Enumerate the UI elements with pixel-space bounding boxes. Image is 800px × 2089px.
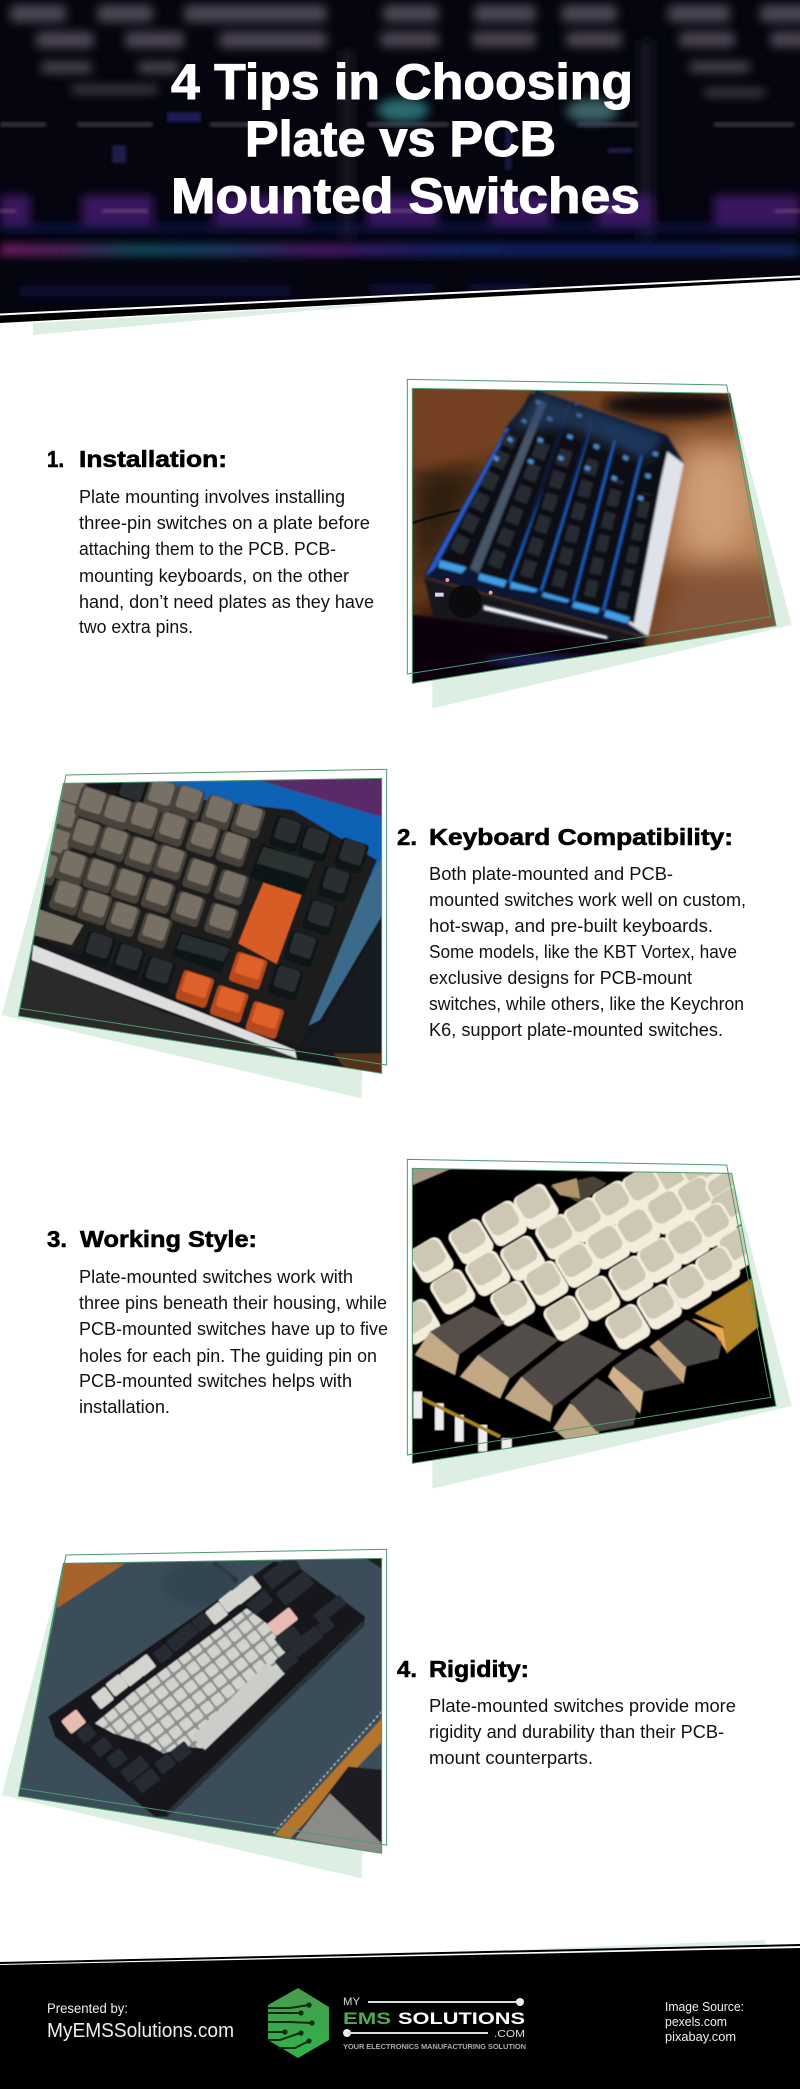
gold key (695, 1278, 758, 1353)
frame outline 2 (18, 769, 387, 1073)
body 4: Plate-mounted switches provide more (429, 1696, 736, 1716)
function keys (91, 1575, 262, 1710)
panel: photo 2 orange keycaps keyboard (0, 760, 400, 1098)
light strip (0, 245, 800, 255)
header white line (0, 276, 800, 314)
body 4: rigidity and durability than their PCB- (429, 1722, 724, 1742)
body 3: three pins beneath their housing, while (79, 1293, 387, 1313)
teal glows (377, 98, 618, 123)
keyboard case (48, 1562, 365, 1817)
green shadow 1 (432, 393, 792, 708)
body 1: three-pin switches on a plate before (79, 513, 370, 533)
body 3: holes for each pin. The guiding pin on (79, 1346, 377, 1366)
body 2: Both plate-mounted and PCB- (429, 864, 673, 884)
title: Plate vs PCB (245, 111, 556, 167)
blue legends (495, 400, 657, 500)
header keyboard photo (0, 0, 800, 320)
title: 4 Tips in Choosing (171, 54, 633, 110)
footer black edge (0, 1944, 800, 1964)
panel: 4 rigidity text (397, 1656, 736, 1768)
image source: pixabay.com (665, 2030, 736, 2044)
frame outline 4 (18, 1549, 387, 1853)
panel: 3 working style text (47, 1226, 388, 1417)
logo (268, 1988, 526, 2058)
body 2: switches, while others, like the Keychron (429, 994, 744, 1014)
body 2 (429, 864, 746, 1040)
photo 1 (412, 389, 776, 683)
footer band (0, 1940, 800, 2089)
body 3: installation. (79, 1397, 170, 1417)
dark modifier keys (415, 1332, 460, 1375)
body 1: mounting keyboards, on the other (79, 566, 349, 586)
cream keys back to front (655, 1172, 688, 1192)
body 1 (79, 487, 374, 637)
body 2: exclusive designs for PCB-mount (429, 968, 692, 988)
panel: 2 keyboard compatibility text (397, 824, 746, 1040)
body 2: Some models, like the KBT Vortex, have (429, 942, 737, 962)
heading 3: 3. (47, 1226, 67, 1252)
panel: photo 3 cream keycaps keyboard (406, 1158, 792, 1488)
logo wordmark: SOLUTIONS (398, 2009, 525, 2028)
heading 4: 4. (397, 1656, 417, 1682)
footer black panel (0, 1948, 800, 2089)
top blur haze (510, 392, 663, 460)
presented by (47, 2001, 234, 2042)
body 2: mounted switches work well on custom, (429, 890, 746, 910)
heading 1: Installation: (79, 446, 227, 472)
logo wordmark: EMS (343, 2009, 391, 2028)
panel: photo 1 blue-lit keyboard (406, 378, 792, 708)
body 4 (429, 1696, 736, 1768)
body 1: attaching them to the PCB. PCB- (79, 539, 336, 559)
key columns (440, 393, 669, 623)
faint key legends (112, 112, 632, 170)
accent: header green wedge (33, 302, 408, 335)
frame outline 3 (407, 1159, 776, 1463)
heading 4: Rigidity: (429, 1656, 529, 1682)
footer green wedge (380, 1940, 765, 1955)
body 1: Plate mounting involves installing (79, 487, 345, 507)
photo 3 (412, 1169, 776, 1463)
panel: 1 installation text (47, 446, 374, 637)
image source: Image Source: (665, 2000, 744, 2014)
key tops (457, 435, 647, 608)
body 1: hand, don’t need plates as they have (79, 592, 374, 612)
green shadow 2 (2, 783, 363, 1098)
green shadow 3 (432, 1173, 792, 1488)
body 3: Plate-mounted switches work with (79, 1267, 353, 1287)
photo 2 (19, 779, 382, 1073)
orange keys (238, 883, 302, 964)
logo wordmark: YOUR ELECTRONICS MANUFACTURING SOLUTION (343, 2042, 526, 2051)
logo wordmark (343, 1996, 526, 2051)
purple row (0, 195, 800, 231)
body 1: two extra pins. (79, 617, 193, 637)
body 4: mount counterparts. (429, 1748, 593, 1768)
image source: pexels.com (665, 2015, 727, 2029)
icon: circuit hexagon (268, 1988, 329, 2058)
front bar (424, 578, 647, 650)
heading 3: Working Style: (80, 1226, 257, 1252)
heading 1: 1. (47, 446, 64, 472)
photo 4 (19, 1559, 382, 1853)
black keys (270, 816, 304, 852)
lit bottoms (438, 560, 630, 623)
body 3 (79, 1267, 388, 1417)
header black edge (0, 274, 800, 323)
title: Mounted Switches (171, 168, 640, 224)
body 2: K6, support plate-mounted switches. (429, 1020, 723, 1040)
presented by: MyEMSSolutions.com (47, 2020, 234, 2042)
heading 2: 2. (397, 824, 417, 850)
white alpha block (95, 1608, 285, 1753)
body 3: PCB-mounted switches have up to five (79, 1319, 388, 1339)
panel: photo 4 dark tenkeyless keyboard (0, 1540, 400, 1878)
presented by: Presented by: (47, 2001, 128, 2016)
logo wordmark: MY (343, 1996, 361, 2008)
header band (0, 0, 800, 335)
keyboard body (423, 390, 684, 637)
body 3: PCB-mounted switches helps with (79, 1371, 352, 1391)
title (171, 54, 640, 224)
key field (81, 790, 377, 1027)
frame outline 1 (407, 379, 776, 683)
switch pins (413, 1392, 512, 1458)
body 2: hot-swap, and pre-built keyboards. (429, 916, 713, 936)
image source (665, 2000, 744, 2044)
pink keys (61, 1709, 86, 1734)
knob (448, 585, 482, 618)
blue gap lines (509, 403, 642, 611)
heading 2: Keyboard Compatibility: (429, 824, 733, 850)
logo wordmark: .COM (494, 2029, 525, 2040)
green shadow 4 (2, 1563, 363, 1878)
